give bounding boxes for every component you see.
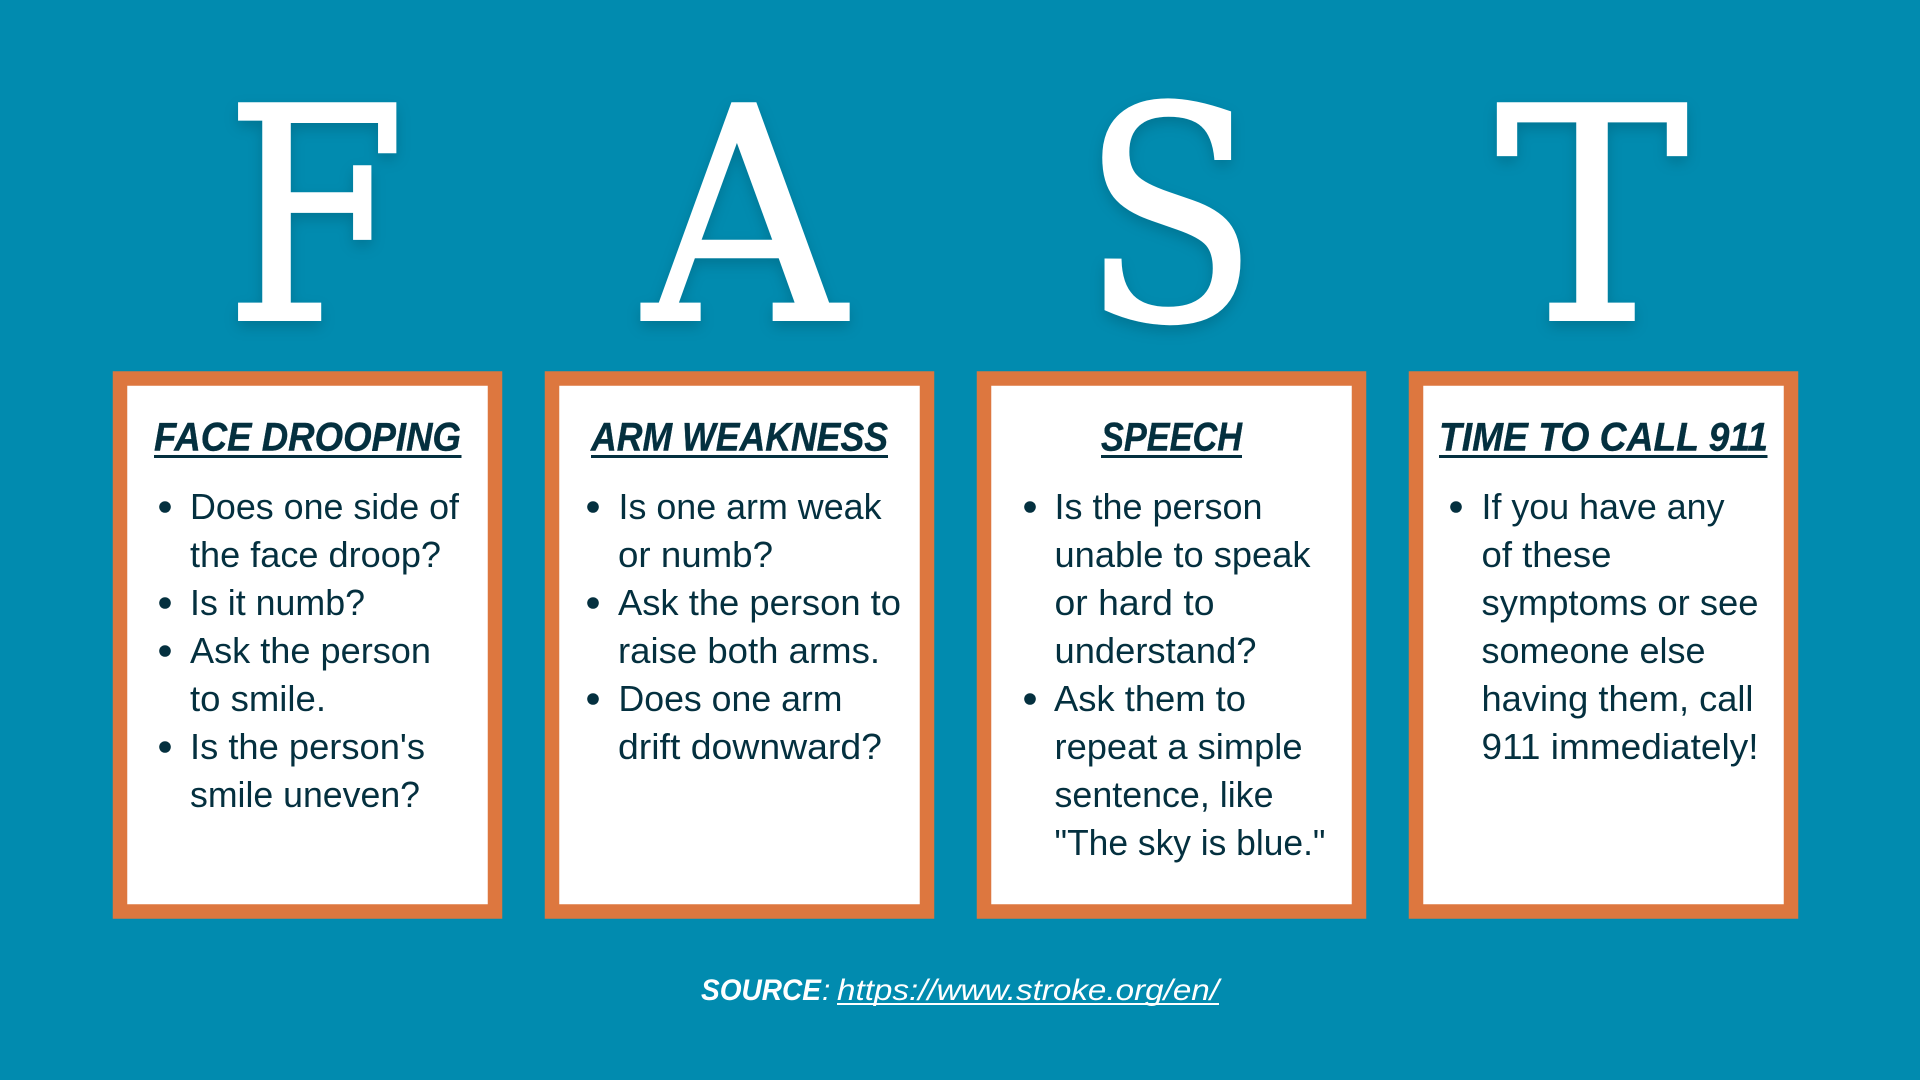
- bullet list: having them, call: [1482, 678, 1754, 719]
- bullet list: Is the person's: [190, 726, 425, 767]
- bullet list: [587, 486, 901, 767]
- panel: speech: [984, 378, 1359, 912]
- bullet list: to smile.: [190, 678, 326, 719]
- bullet list: drift downward?: [618, 726, 882, 767]
- bullet list: sentence, like: [1054, 774, 1274, 815]
- bullet list: symptoms or see: [1482, 582, 1758, 623]
- letter A: A: [639, 44, 849, 390]
- bullet list: or hard to: [1054, 582, 1214, 623]
- bullet list: Ask them to: [1054, 678, 1246, 719]
- source line: https://www.stroke.org/en/: [837, 974, 1222, 1007]
- bullet list: Is it numb?: [190, 582, 365, 623]
- bullet list: Does one arm: [618, 678, 842, 719]
- bullet list: 911 immediately!: [1482, 726, 1758, 767]
- card frame: [1416, 378, 1791, 912]
- bullet list: "The sky is blue.": [1054, 822, 1326, 863]
- source line: :: [822, 974, 830, 1007]
- heading: SPEECH: [1101, 416, 1243, 460]
- bullet list: Ask the person to: [618, 582, 901, 623]
- bullet list: unable to speak: [1054, 534, 1311, 575]
- bullet list: Is the person: [1054, 486, 1262, 527]
- card frame: [120, 378, 495, 912]
- panel: arm weakness: [552, 378, 927, 912]
- bullet list: understand?: [1054, 630, 1256, 671]
- letter F: F: [225, 44, 406, 390]
- card frame: [552, 378, 927, 912]
- letter S: S: [1082, 44, 1258, 390]
- bullet list: smile uneven?: [190, 774, 420, 815]
- panel: face drooping: [120, 378, 495, 912]
- letter T: T: [1496, 44, 1690, 390]
- bullet list: If you have any: [1482, 486, 1725, 527]
- bullet list: Does one side of: [190, 486, 460, 527]
- heading: FACE DROOPING: [154, 416, 461, 460]
- bullet list: Is one arm weak: [618, 486, 882, 527]
- bullet list: [1024, 486, 1326, 863]
- panel: time to call 911: [1416, 378, 1791, 912]
- card frame: [984, 378, 1359, 912]
- title letters: FAST: [225, 44, 1690, 390]
- bullet list: the face droop?: [190, 534, 441, 575]
- bullet list: or numb?: [618, 534, 773, 575]
- bullet list: repeat a simple: [1054, 726, 1302, 767]
- bullet list: someone else: [1482, 630, 1706, 671]
- bullet list: [1450, 486, 1758, 767]
- bullet list: [159, 486, 460, 815]
- heading: TIME TO CALL 911: [1439, 416, 1768, 460]
- source line: [701, 974, 1222, 1007]
- heading: ARM WEAKNESS: [590, 416, 888, 460]
- bullet list: of these: [1482, 534, 1612, 575]
- bullet list: raise both arms.: [618, 630, 880, 671]
- bullet list: Ask the person: [190, 630, 431, 671]
- source line: SOURCE: [701, 974, 822, 1007]
